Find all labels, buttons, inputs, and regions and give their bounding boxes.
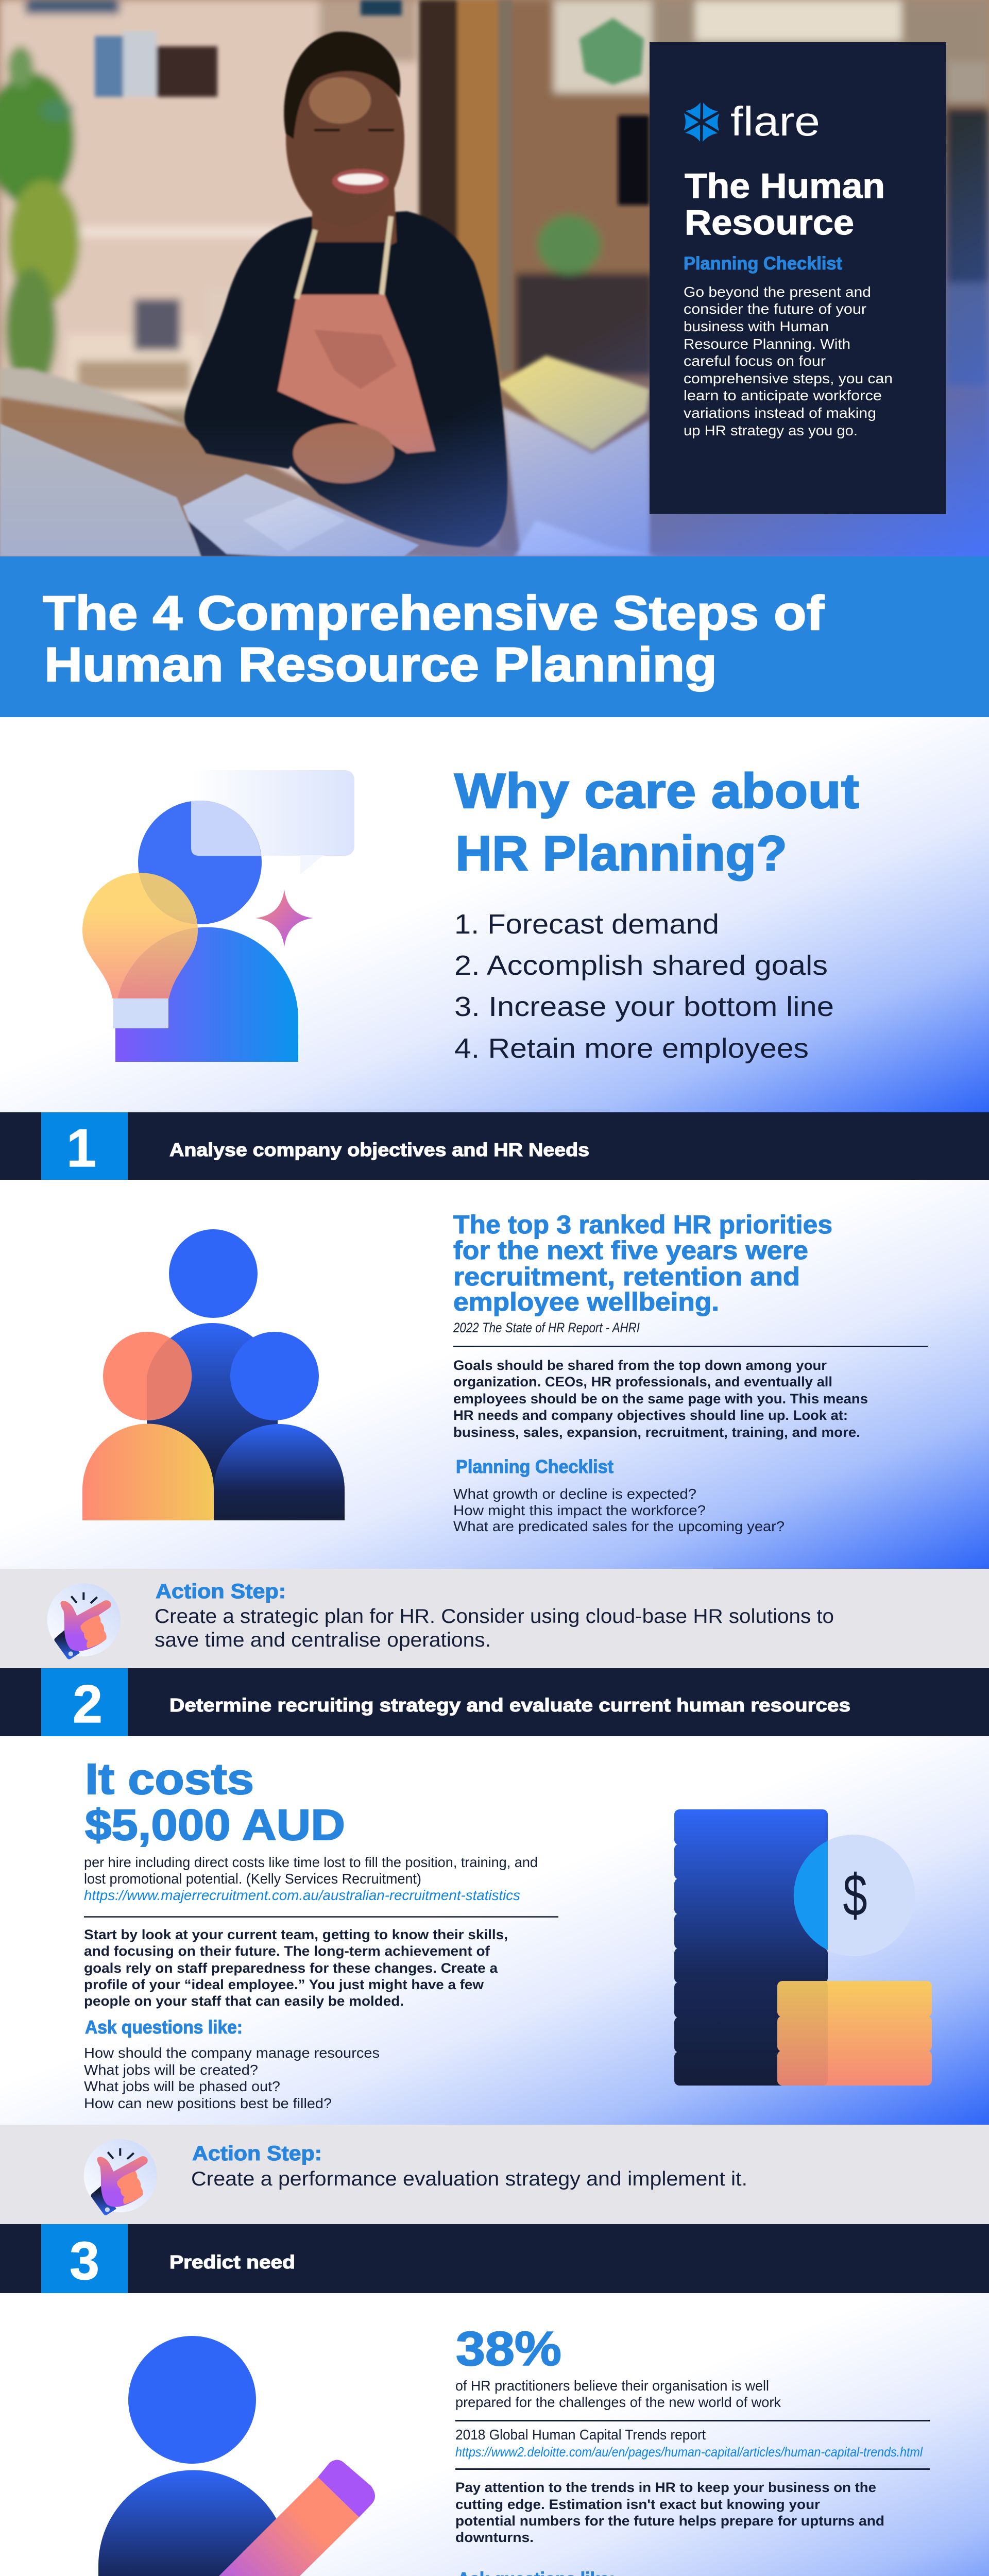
body text: Start by look at your current team, getting to know their skills,: [84, 1927, 508, 1942]
reasons list: 2. Accomplish shared goals: [454, 950, 828, 981]
hero card body text: Resource Planning. With: [684, 336, 850, 352]
action step 2: Action Step:: [192, 2142, 322, 2165]
step 1 header bar: Analyse company objectives and HR Needs: [169, 1139, 589, 1160]
hero card body text: up HR strategy as you go.: [684, 422, 858, 438]
hero card body text: careful focus on four: [684, 353, 826, 369]
action step 1: save time and centralise operations.: [155, 1629, 491, 1651]
illustration: person with idea bulb and speech bubble: [82, 770, 354, 1062]
step 2 header bar: [0, 1668, 989, 1736]
step 2 header bar: 2: [73, 1674, 103, 1734]
title band: The 4 Comprehensive Steps of: [43, 586, 825, 640]
checklist questions: What growth or decline is expected?: [453, 1486, 696, 1502]
body text: organization. CEOs, HR professionals, and eventually all: [453, 1374, 832, 1389]
panel: step 1 content: [0, 1180, 989, 1569]
hero card body text: variations instead of making: [684, 405, 876, 421]
hero card subtitle: Planning Checklist: [684, 253, 842, 274]
body text: and focusing on their future. The long-term achievement of: [84, 1943, 490, 1959]
stat description: [455, 2378, 781, 2410]
icon: flare logo mark: [676, 98, 727, 146]
action step 2: Create a performance evaluation strategy and implement it.: [191, 2168, 747, 2190]
step 1 header bar: [0, 1112, 989, 1180]
questions list: What jobs will be created?: [84, 2062, 258, 2078]
illustration: coin stacks and dollar coin: [674, 1809, 932, 2086]
reasons list: 1. Forecast demand: [454, 909, 719, 940]
title band: [0, 556, 989, 717]
body text: potential numbers for the future helps prepare for upturns and: [455, 2513, 884, 2529]
body text: cutting edge. Estimation isn't exact but knowing your: [455, 2497, 821, 2512]
stat heading: The top 3 ranked HR priorities: [453, 1210, 832, 1239]
stat description and link: per hire including direct costs like time lost to fill the position, training, and: [84, 1854, 538, 1870]
stat description and link: [84, 1854, 538, 1903]
action step 1: Action Step:: [156, 1580, 286, 1603]
icon: pointing hand: [47, 1583, 121, 1659]
stat heading: It costs: [85, 1755, 254, 1803]
body text: Goals should be shared from the top down among your: [453, 1358, 827, 1373]
stat heading: for the next five years were: [453, 1236, 808, 1265]
stat description and link: https://www.majerrecruitment.com.au/australian-recruitment-statistics: [84, 1887, 520, 1903]
stat description: of HR practitioners believe their organisation is well: [455, 2378, 769, 2394]
hero card body text: learn to anticipate workforce: [684, 387, 882, 403]
illustration: coin stacks and dollar coin: $: [843, 1862, 867, 1928]
checklist heading: Planning Checklist: [456, 1456, 613, 1477]
reasons list: 4. Retain more employees: [454, 1033, 809, 1064]
logo wordmark: flare: [730, 98, 820, 144]
stat description and link: lost promotional potential. (Kelly Services Recruitment): [84, 1871, 421, 1887]
questions list: [84, 2045, 380, 2111]
body text: business, sales, expansion, recruitment, training, and more.: [453, 1425, 860, 1440]
body text: [453, 1358, 868, 1440]
panel: step 3 content: [0, 2293, 989, 2576]
hero card title: Resource: [685, 203, 854, 242]
panel: hero intro card: [650, 42, 946, 514]
stat: 38%: 38%: [456, 2321, 561, 2376]
step 3 header bar: Predict need: [169, 2251, 295, 2273]
heading: Why care about: [454, 764, 859, 819]
stat heading: [85, 1755, 345, 1849]
questions list: What jobs will be phased out?: [84, 2078, 280, 2094]
body text: employees should be on the same page with you. This means: [453, 1391, 868, 1406]
body text: profile of your “ideal employee.” You just might have a few: [84, 1977, 484, 1992]
step 3 header bar: [0, 2224, 989, 2293]
stat description: prepared for the challenges of the new world of work: [455, 2394, 781, 2410]
illustration: person with pencil: [98, 2336, 375, 2576]
heading: [454, 764, 859, 881]
panel: step 2 content: [0, 1736, 989, 2125]
illustration: team of three people: [82, 1229, 345, 1520]
stat heading: $5,000 AUD: [85, 1801, 345, 1849]
checklist questions: [453, 1486, 785, 1534]
body text: people on your staff that can easily be molded.: [84, 1993, 404, 2009]
icon: pointing hand: [84, 2139, 157, 2215]
hero card body text: [684, 284, 893, 438]
step 1 header bar: 1: [66, 1118, 96, 1178]
questions list: How can new positions best be filled?: [84, 2095, 332, 2111]
hero card body text: Go beyond the present and: [684, 284, 871, 300]
reasons list: 3. Increase your bottom line: [454, 991, 834, 1022]
stat heading: recruitment, retention and: [453, 1262, 800, 1291]
source and link: 2018 Global Human Capital Trends report: [455, 2427, 706, 2443]
step 3 header bar: 3: [70, 2231, 99, 2291]
action step 1: [0, 1569, 989, 1668]
stat heading: employee wellbeing.: [453, 1287, 719, 1316]
body text: goals rely on staff preparedness for these changes. Create a: [84, 1960, 498, 1976]
body text: [84, 1927, 508, 2009]
body text: Pay attention to the trends in HR to keep your business on the: [455, 2480, 876, 2495]
questions heading: Ask questions like:: [85, 2016, 243, 2038]
hero card body text: comprehensive steps, you can: [684, 370, 893, 386]
questions list: How should the company manage resources: [84, 2045, 380, 2061]
hero card title: [685, 166, 885, 242]
hero card body text: business with Human: [684, 318, 829, 334]
body text: [455, 2480, 884, 2545]
reasons list: [454, 909, 834, 1064]
heading: HR Planning?: [455, 826, 787, 881]
source and link: [455, 2427, 923, 2460]
panel: hero photo: [0, 0, 989, 556]
title band: Human Resource Planning: [44, 637, 717, 691]
source and link: https://www2.deloitte.com/au/en/pages/human-capital/articles/human-capital-trends.html: [455, 2444, 923, 2460]
hero card body text: consider the future of your: [684, 301, 866, 317]
body text: HR needs and company objectives should line up. Look at:: [453, 1408, 848, 1423]
body text: downturns.: [455, 2530, 534, 2545]
stat heading: [453, 1210, 832, 1316]
source citation: 2022 The State of HR Report - AHRI: [453, 1320, 640, 1335]
step 2 header bar: Determine recruiting strategy and evaluate current human resources: [169, 1694, 850, 1716]
hero card title: The Human: [685, 166, 885, 206]
action step 1: Create a strategic plan for HR. Consider using cloud-base HR solutions to: [155, 1605, 834, 1628]
panel: why care about HR planning: [0, 717, 989, 1112]
checklist questions: How might this impact the workforce?: [453, 1502, 706, 1518]
checklist questions: What are predicated sales for the upcoming year?: [453, 1518, 785, 1534]
action step 2: [0, 2125, 989, 2224]
